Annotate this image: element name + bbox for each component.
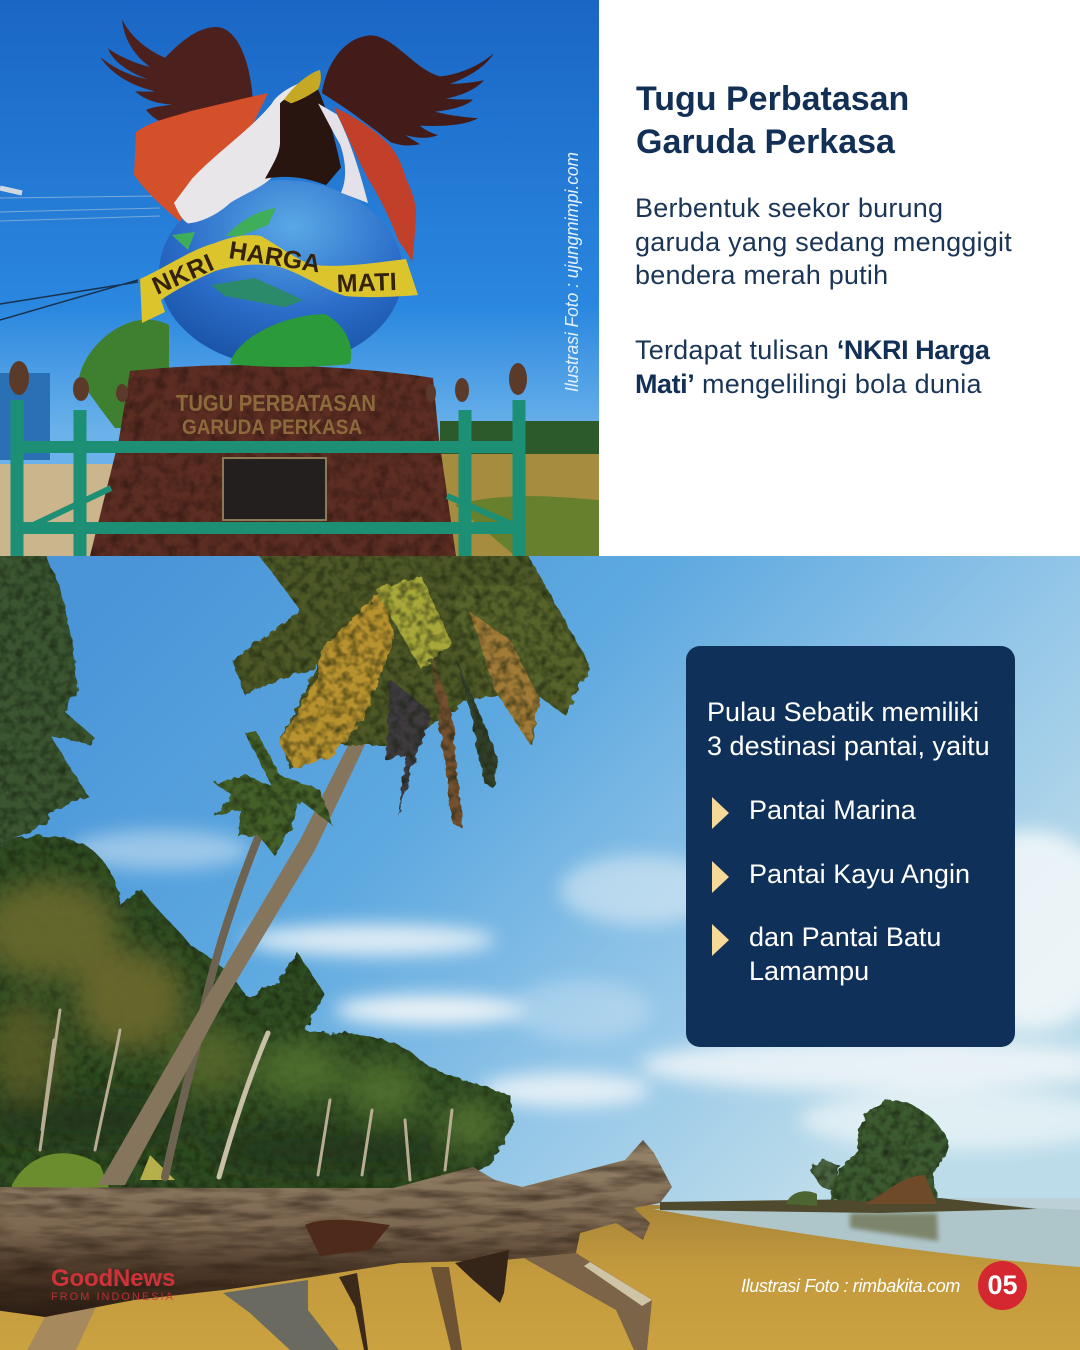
banner: MATI xyxy=(336,268,397,298)
far spit xyxy=(660,1198,1037,1213)
flag red xyxy=(134,93,268,222)
big palm crown xyxy=(232,550,590,829)
logo: GoodNews from Indonesia: GoodNews xyxy=(51,1265,175,1292)
plaque xyxy=(223,458,326,520)
eagle body xyxy=(265,89,341,185)
fallen tree branches xyxy=(27,1253,652,1350)
title: Garuda Perkasa xyxy=(636,123,895,161)
text block: description: garuda yang sedang menggigit xyxy=(635,226,1012,256)
card heading: 3 destinasi pantai, yaitu xyxy=(707,731,990,761)
fallen tree log xyxy=(0,1140,672,1317)
pedestal lettering: TUGU PERBATASAN xyxy=(176,390,376,416)
title: Tugu Perbatasan xyxy=(636,80,909,118)
list item: Pantai Batu Lamampu: dan Pantai Batu xyxy=(749,922,941,952)
sand xyxy=(0,1205,1080,1350)
list item: Pantai Marina: Pantai Marina xyxy=(749,795,916,825)
pedestal xyxy=(90,365,456,556)
globe xyxy=(159,180,403,366)
clouds xyxy=(70,830,1080,1150)
photo: Garuda monument xyxy=(0,0,599,556)
panel: beach destinations xyxy=(686,646,1015,1047)
right wing xyxy=(322,35,494,145)
flag white right xyxy=(318,103,368,203)
photo credit vertical: Ilustrasi Foto : ujungmimpi.com xyxy=(562,152,582,392)
wires xyxy=(0,280,138,320)
flag white xyxy=(174,82,303,223)
eagle and flag xyxy=(100,20,494,263)
banner: NKRI xyxy=(148,249,218,300)
page number badge xyxy=(978,1261,1027,1310)
text block: NKRI Harga Mati xyxy=(635,335,990,398)
green fence xyxy=(17,400,520,556)
forest xyxy=(0,836,513,1192)
card heading xyxy=(707,697,990,761)
list item: Pantai Kayu Angin: Pantai Kayu Angin xyxy=(749,859,970,889)
text block: NKRI Harga Mati: Mati’ mengelilingi bola dunia xyxy=(635,368,982,398)
banner xyxy=(140,235,418,323)
text block: description: bendera merah putih xyxy=(635,260,888,290)
sea xyxy=(653,1205,1080,1267)
icon: arrow 1 xyxy=(712,797,729,829)
pedestal lettering xyxy=(176,390,376,439)
photo: beach with coconut palms xyxy=(0,556,1080,1350)
banner: HARGA xyxy=(227,236,322,278)
logo: GoodNews from Indonesia: FROM INDONESIA xyxy=(51,1291,175,1303)
title xyxy=(636,80,909,161)
pedestal lettering: GARUDA PERKASA xyxy=(182,416,362,439)
left tree xyxy=(0,540,96,860)
icon: arrow 2 xyxy=(712,861,729,893)
list item: Pantai Batu Lamampu xyxy=(749,922,941,986)
thin trunks xyxy=(40,833,452,1180)
photo credit: Ilustrasi Foto : rimbakita.com xyxy=(741,1276,960,1296)
text block: description: Berbentuk seekor burung xyxy=(635,193,943,223)
icon: arrow 3 xyxy=(712,924,729,956)
small palm crown xyxy=(214,731,333,856)
island tree xyxy=(830,1100,948,1204)
card heading: Pulau Sebatik memiliki xyxy=(707,697,979,727)
log knot xyxy=(305,1220,390,1256)
text block: description xyxy=(635,193,1012,290)
page number badge: 05 xyxy=(987,1270,1018,1300)
text block: NKRI Harga Mati: Terdapat tulisan ‘NKRI Harga xyxy=(635,335,989,365)
left wing xyxy=(100,20,253,123)
list item: Pantai Batu Lamampu: Lamampu xyxy=(749,956,869,986)
ground and trees xyxy=(0,464,130,556)
beak xyxy=(284,70,321,103)
big palm trunk xyxy=(98,726,372,1185)
